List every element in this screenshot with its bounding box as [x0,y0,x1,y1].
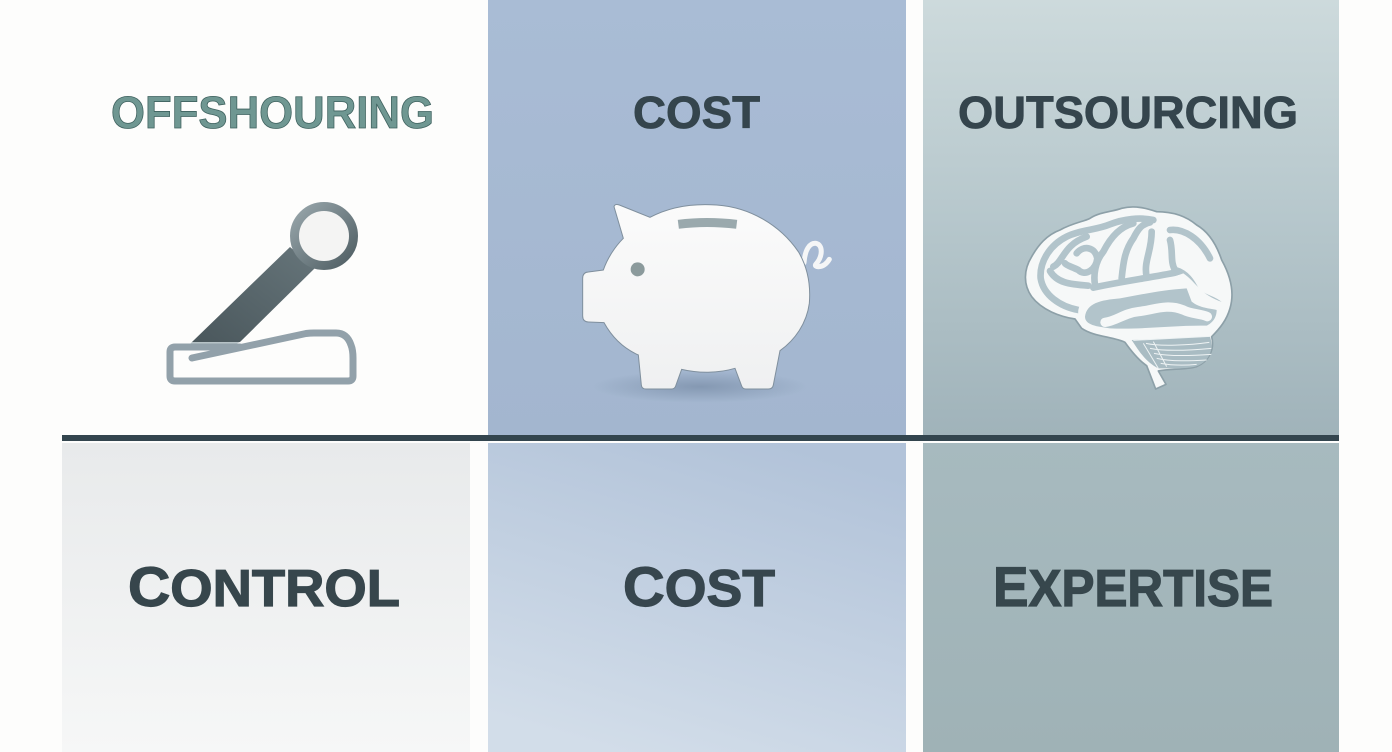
panel: control [62,443,470,752]
temporal gyrus [1105,307,1207,322]
brain folds [1041,219,1220,310]
pig eye [631,262,645,276]
temporal fold [1085,288,1217,329]
label: expertise: EXPERTISE [993,555,1273,618]
panel: expertise [923,443,1339,752]
pig slot [678,222,737,224]
heading: outsourcing: OUTSOURCING [958,87,1298,138]
icon: lever [170,206,354,381]
panel: cost header [488,0,906,436]
pig shadow [593,371,807,403]
panel: outsourcing header [923,0,1339,436]
heading: offshouring: OFFSHOURING [111,87,434,138]
label: control: CONTROL [128,555,400,618]
icon: brain [1025,207,1232,389]
label: cost: COST [623,555,775,618]
heading: cost: COST [633,87,760,138]
divider line [62,435,1339,441]
pig tail [804,243,829,267]
brain cerebellum [1132,336,1211,368]
icon: piggy bank [583,204,829,403]
pig body [583,204,810,389]
panel: cost [488,443,906,752]
brain temporal lobe [1078,273,1224,335]
brain outline [1025,207,1232,389]
